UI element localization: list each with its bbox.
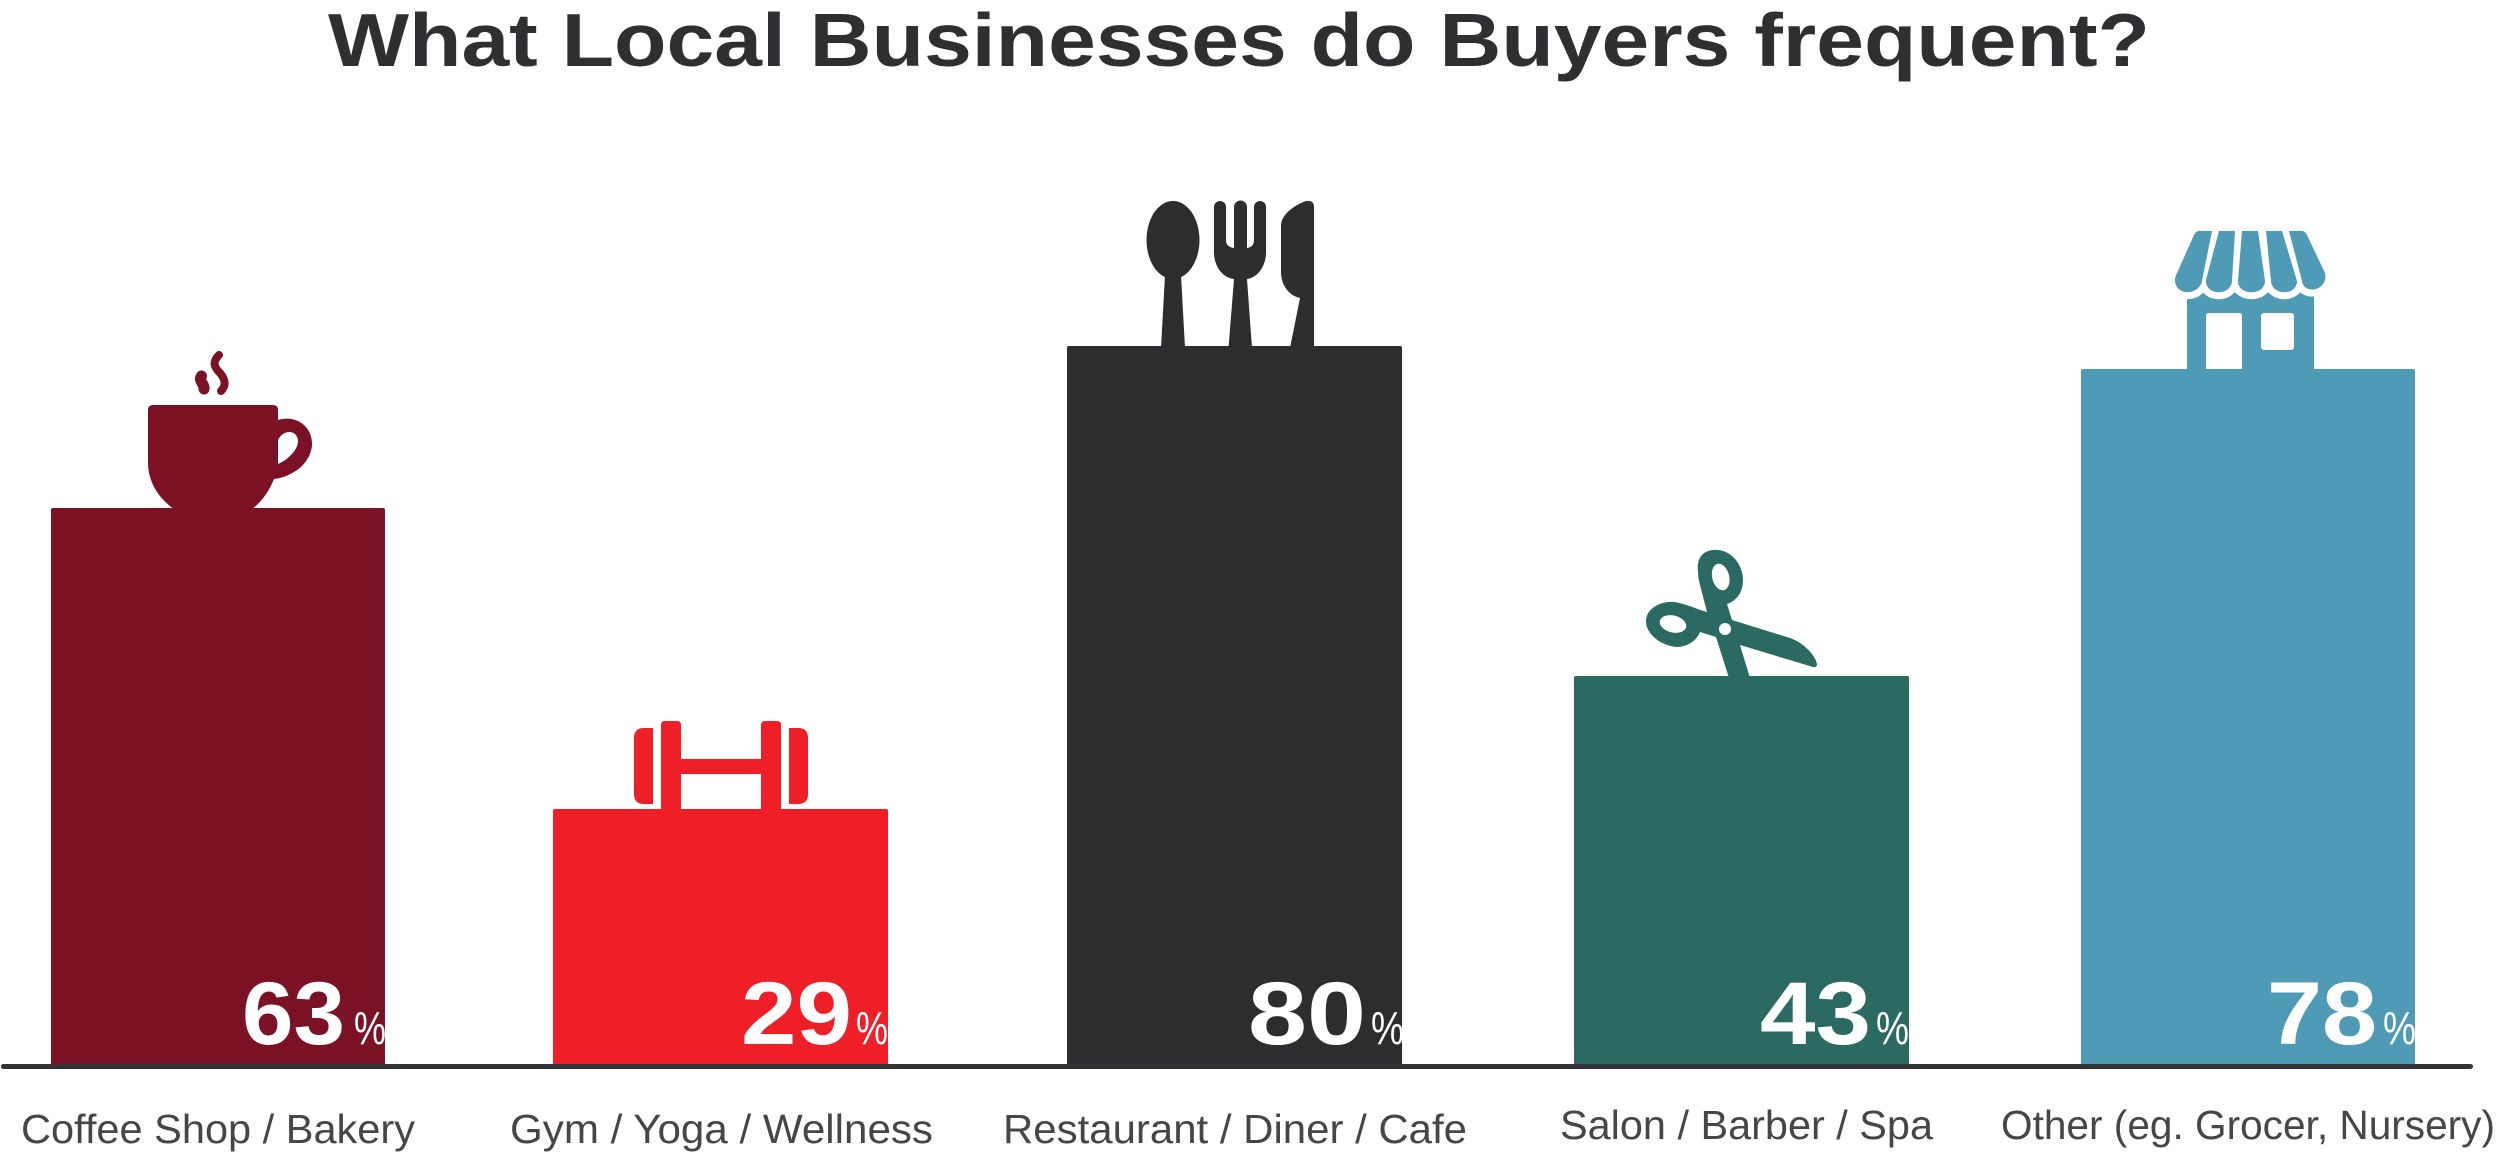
- value: 43%: %: [1876, 1002, 1909, 1054]
- icon: scissors: [1646, 550, 1817, 678]
- icon: storefront: [2175, 231, 2325, 373]
- icon: coffee cup: [148, 355, 312, 510]
- value: 80%: %: [1371, 1002, 1404, 1054]
- value: 43%: [1760, 963, 1909, 1063]
- value: 29%: %: [856, 1002, 888, 1054]
- baseline axis: [1, 1064, 2473, 1069]
- panel: coffee shop / bakery: [21, 355, 416, 1152]
- label: other: Other (eg. Grocer, Nursery): [2001, 1102, 2495, 1148]
- value: 80%: 80: [1248, 963, 1366, 1063]
- panel: gym / yoga / wellness: [510, 721, 933, 1152]
- panel: restaurant / diner / cafe: [1003, 201, 1467, 1152]
- bar: restaurant 80%: [1067, 346, 1402, 1068]
- bar: gym 29%: [553, 809, 888, 1068]
- bar: salon 43%: [1574, 676, 1909, 1068]
- value: 78%: %: [2383, 1002, 2416, 1054]
- value: 29%: 29: [741, 963, 852, 1063]
- value: 63%: %: [354, 1002, 386, 1054]
- value: 63%: [242, 963, 386, 1063]
- value: 78%: [2267, 963, 2416, 1063]
- label: restaurant: Restaurant / Diner / Cafe: [1003, 1106, 1467, 1152]
- value: 29%: [741, 963, 888, 1063]
- bar: coffee 63%: [51, 508, 385, 1068]
- icon: spoon fork knife: [1146, 201, 1314, 348]
- title: What Local Businesses do Buyers frequent?: [328, 0, 2150, 82]
- panel: salon / barber / spa: [1560, 550, 1933, 1148]
- value: 80%: [1248, 963, 1404, 1063]
- bar: other 78%: [2081, 369, 2415, 1068]
- label: coffee shop: Coffee Shop / Bakery: [21, 1106, 416, 1152]
- panel: other: [2001, 231, 2495, 1148]
- label: gym: Gym / Yoga / Wellness: [510, 1106, 933, 1152]
- value: 78%: 78: [2267, 963, 2377, 1063]
- label: salon: Salon / Barber / Spa: [1560, 1102, 1933, 1148]
- value: 43%: 43: [1760, 963, 1871, 1063]
- icon: dumbbell: [634, 721, 808, 812]
- value: 63%: 63: [242, 963, 345, 1063]
